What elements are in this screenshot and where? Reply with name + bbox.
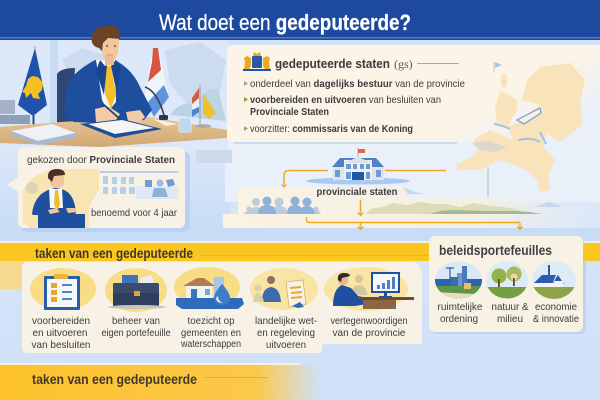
icon: ruimtelijke ordening bbox=[435, 261, 483, 325]
section band: bottom heading bbox=[0, 363, 320, 400]
panel: gedeputeerde staten: (gs) bbox=[394, 57, 413, 71]
task 1: besluiten: van besluiten bbox=[32, 339, 91, 351]
task 3: toezicht: gemeenten en bbox=[181, 327, 241, 339]
illustration: sworn-in official bbox=[23, 169, 178, 228]
callout: gekozen door Provinciale Staten bbox=[7, 147, 190, 232]
people silhouettes bbox=[244, 196, 321, 214]
task 2: portefeuille bbox=[102, 268, 171, 339]
task 1: besluiten: voorbereiden bbox=[32, 315, 90, 327]
document folder bbox=[80, 119, 162, 138]
task 5: vertegenwoordigen: vertegenwoordigen bbox=[330, 315, 408, 327]
section band: taken van een gedeputeerde bbox=[0, 241, 600, 289]
icon: provincial flag bbox=[18, 46, 47, 125]
figure: gedeputeerde at desk bbox=[65, 26, 152, 124]
task 4: wet- en regeleving: uitvoeren bbox=[266, 339, 306, 351]
panel: taken bbox=[22, 262, 422, 353]
task 1: besluiten: en uitvoeren bbox=[32, 327, 88, 339]
task 2: portefeuille: beheer van bbox=[112, 315, 160, 327]
panel: gedeputeerde staten bbox=[227, 45, 600, 200]
bullet list: onderdeel van dagelijks bestuur van de provincie bbox=[250, 78, 465, 90]
table flags and glass bbox=[153, 85, 216, 132]
task 4: wet- en regeleving: landelijke wet- bbox=[255, 315, 317, 327]
task 1: besluiten bbox=[30, 268, 96, 351]
building: provincial government bbox=[306, 148, 410, 184]
icon: economie en innovatie: & innovatie bbox=[533, 313, 579, 325]
task 5: vertegenwoordigen: van de provincie bbox=[332, 327, 406, 339]
callout: gekozen door Provinciale Staten: benoemd voor 4 jaar bbox=[91, 207, 177, 219]
task 2: portefeuille: eigen portefeuille bbox=[102, 327, 171, 339]
paper stack bbox=[11, 124, 76, 145]
section band: taken van een gedeputeerde: taken van een gedeputeerde bbox=[35, 246, 193, 261]
icon: natuur en milieu: natuur & bbox=[492, 301, 528, 313]
icon: economie en innovatie: economie bbox=[535, 301, 577, 313]
task 3: toezicht: toezicht op bbox=[188, 315, 235, 327]
arrows: connections bbox=[281, 170, 524, 230]
section band: bottom heading: taken van een gedeputeerde bbox=[32, 371, 197, 387]
panel: provinciale staten: provinciale staten bbox=[316, 186, 398, 198]
landscape strip bbox=[365, 202, 563, 214]
callout: gekozen door Provinciale Staten: gekozen door Provinciale Staten bbox=[27, 154, 175, 166]
bullet list: voorzitter: commissaris van de Koning bbox=[250, 123, 413, 135]
icon: economie en innovatie bbox=[531, 261, 579, 325]
task 4: wet- en regeleving bbox=[250, 268, 318, 351]
desk bbox=[0, 117, 227, 147]
title: Wat doet een gedeputeerde? bbox=[159, 10, 411, 35]
icon: coat of arms bbox=[243, 52, 271, 71]
map of the Netherlands bbox=[457, 62, 585, 200]
bullet list: Provinciale Staten bbox=[250, 106, 329, 118]
icon: ruimtelijke ordening: ruimtelijke bbox=[438, 301, 483, 313]
task 3: toezicht bbox=[174, 267, 244, 350]
icon: ruimtelijke ordening: ordening bbox=[440, 313, 478, 325]
microphone bbox=[145, 87, 164, 115]
panel: beleidsportefeuilles: beleidsportefeuilles bbox=[439, 243, 552, 258]
icon: natuur en milieu: milieu bbox=[497, 313, 523, 325]
bullet list: voorbereiden en uitvoeren van besluiten van bbox=[250, 94, 441, 106]
chair bbox=[57, 68, 75, 124]
task 4: wet- en regeleving: en regeleving bbox=[257, 327, 315, 339]
office scene illustration bbox=[0, 26, 228, 150]
icon: natuur en milieu bbox=[486, 261, 528, 325]
heading: gedeputeerde staten bbox=[275, 57, 390, 71]
panel: provinciale staten bbox=[223, 186, 600, 228]
task 3: toezicht: waterschappen bbox=[180, 338, 241, 350]
task 5: vertegenwoordigen bbox=[324, 267, 414, 339]
icon: Dutch flag bbox=[145, 48, 169, 117]
bullet list bbox=[244, 78, 465, 135]
panel: beleidsportefeuilles bbox=[429, 236, 600, 334]
title bar bbox=[0, 0, 600, 40]
